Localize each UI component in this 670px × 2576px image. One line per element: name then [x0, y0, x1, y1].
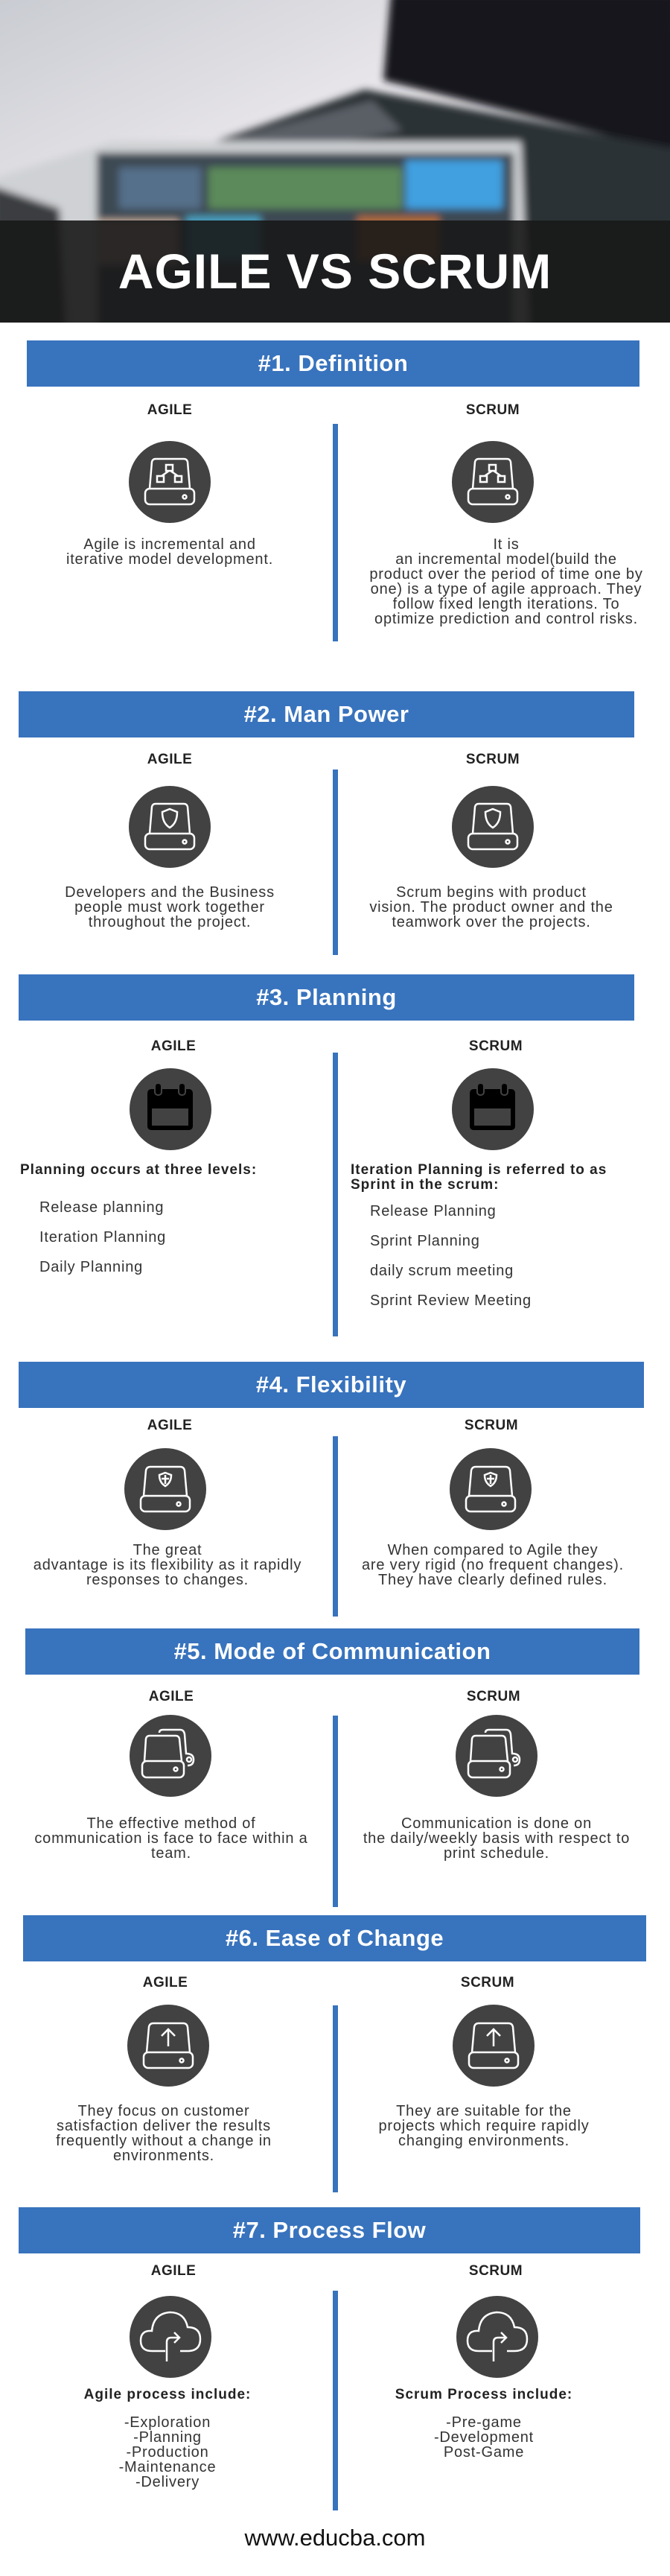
label agile: AGILE: [147, 402, 192, 418]
scrum list: Release Planning: [370, 1203, 497, 1219]
heading: [23, 1915, 646, 1961]
label agile: AGILE: [151, 1038, 196, 1054]
icon: drive shield scrum: [452, 786, 534, 868]
agile text: [34, 1815, 308, 1862]
scrum list: Sprint in the scrum:: [351, 1177, 499, 1193]
scrum text: Scrum begins with product: [396, 884, 587, 901]
scrum text: Communication is done on: [401, 1815, 592, 1832]
agile text: throughout the project.: [89, 914, 251, 930]
scrum text: It is: [493, 536, 520, 553]
heading: #2. Man Power: [244, 701, 409, 727]
agile text: advantage is its flexibility as it rapidly: [34, 1557, 302, 1573]
agile text: Agile is incremental and: [83, 536, 256, 553]
agile text: -Maintenance: [119, 2459, 216, 2475]
agile text: [34, 1542, 302, 1588]
label scrum: SCRUM: [466, 402, 520, 418]
agile text: Developers and the Business: [65, 884, 275, 901]
agile text: frequently without a change in: [56, 2133, 272, 2149]
scrum text: product over the period of time one by: [369, 566, 643, 583]
section 6: Ease of Change: [23, 1915, 646, 2192]
agile text: responses to changes.: [86, 1572, 249, 1588]
icon: calendar scrum: [452, 1068, 534, 1150]
agile text: Agile process include:: [84, 2387, 251, 2402]
label agile: AGILE: [143, 1975, 188, 1990]
label scrum: SCRUM: [461, 1975, 514, 1990]
heading: [25, 1628, 639, 1675]
icon: drive shield agile: [129, 786, 211, 868]
agile list: Planning occurs at three levels:: [20, 1162, 257, 1178]
divider: [333, 1716, 338, 1907]
scrum text: one) is a type of agile approach. They: [371, 581, 642, 597]
scrum text: follow fixed length iterations. To: [393, 596, 619, 612]
heading: [19, 691, 634, 737]
scrum text: They are suitable for the: [396, 2103, 572, 2119]
agile text: communication is face to face within a: [34, 1830, 308, 1847]
heading: #1. Definition: [258, 350, 408, 376]
footer url: www.educba.com: [245, 2525, 425, 2551]
scrum text: [378, 2103, 590, 2149]
heading: [19, 2207, 640, 2253]
heading: #6. Ease of Change: [226, 1925, 444, 1951]
divider: [333, 2291, 338, 2510]
icon: drive network agile: [129, 441, 211, 523]
heading: #4. Flexibility: [256, 1371, 406, 1398]
label scrum: SCRUM: [469, 2263, 523, 2279]
scrum text: teamwork over the projects.: [392, 914, 591, 930]
icon: drive upload agile: [127, 2005, 209, 2087]
scrum text: are very rigid (no frequent changes).: [362, 1557, 624, 1573]
scrum text: Scrum Process include:: [395, 2387, 572, 2402]
icon: two drives scrum: [456, 1715, 537, 1797]
scrum text: They have clearly defined rules.: [378, 1572, 607, 1588]
divider: [333, 2005, 338, 2192]
heading: #5. Mode of Communication: [174, 1638, 491, 1664]
agile text: -Planning: [133, 2429, 202, 2446]
label scrum: SCRUM: [466, 752, 520, 767]
section 3: Planning: [19, 974, 634, 1336]
icon: two drives agile: [130, 1715, 211, 1797]
title band: [0, 221, 670, 323]
heading: #3. Planning: [256, 984, 397, 1010]
divider: [333, 1436, 338, 1617]
icon: drive network scrum: [452, 441, 534, 523]
title band: AGILE VS SCRUM: [118, 244, 552, 299]
section 2: Man Power: [19, 691, 634, 955]
scrum text: projects which require rapidly: [378, 2118, 590, 2134]
icon: cloud arrow scrum: [456, 2296, 538, 2378]
scrum text: [363, 1815, 630, 1862]
icon: drive small shield agile: [124, 1448, 206, 1530]
agile text: [66, 536, 273, 568]
heading: [27, 340, 639, 387]
section 5: Mode of Communication: [25, 1628, 639, 1907]
icon: drive upload scrum: [453, 2005, 535, 2087]
agile text: They focus on customer: [77, 2103, 250, 2119]
scrum text: Post-Game: [444, 2444, 524, 2461]
agile text: -Exploration: [124, 2414, 211, 2431]
agile text: [84, 2387, 251, 2490]
scrum text: an incremental model(build the: [395, 551, 617, 568]
scrum text: [369, 536, 643, 627]
agile text: iterative model development.: [66, 551, 273, 568]
scrum text: [369, 884, 613, 930]
agile text: [56, 2103, 272, 2164]
scrum text: [362, 1542, 624, 1588]
label scrum: SCRUM: [467, 1689, 520, 1704]
scrum text: [395, 2387, 572, 2461]
scrum list: Sprint Planning: [370, 1233, 480, 1249]
scrum list: Sprint Review Meeting: [370, 1292, 532, 1309]
agile text: The effective method of: [86, 1815, 256, 1832]
agile text: -Production: [126, 2444, 209, 2461]
scrum list: [351, 1162, 607, 1309]
divider: [333, 1053, 338, 1336]
label agile: AGILE: [149, 1689, 194, 1704]
scrum text: print schedule.: [444, 1845, 549, 1862]
agile list: Iteration Planning: [39, 1229, 166, 1246]
agile list: Daily Planning: [39, 1259, 143, 1275]
heading: [19, 974, 634, 1021]
scrum text: -Development: [434, 2429, 534, 2446]
scrum text: the daily/weekly basis with respect to: [363, 1830, 630, 1847]
icon: cloud arrow agile: [130, 2296, 211, 2378]
scrum list: Iteration Planning is referred to as: [351, 1162, 607, 1178]
divider: [333, 770, 338, 955]
agile list: Release planning: [39, 1199, 164, 1216]
agile text: -Delivery: [135, 2474, 200, 2490]
icon: drive small shield scrum: [450, 1448, 532, 1530]
label scrum: SCRUM: [469, 1038, 523, 1054]
agile text: people must work together: [74, 899, 265, 916]
scrum text: changing environments.: [398, 2133, 570, 2149]
icon: calendar agile: [130, 1068, 211, 1150]
label agile: AGILE: [147, 752, 192, 767]
agile text: The great: [133, 1542, 202, 1558]
agile text: environments.: [113, 2148, 214, 2164]
scrum list: daily scrum meeting: [370, 1263, 514, 1279]
label agile: AGILE: [151, 2263, 196, 2279]
heading: #7. Process Flow: [233, 2217, 426, 2243]
agile list: [20, 1162, 257, 1275]
label agile: AGILE: [147, 1418, 192, 1433]
agile text: team.: [151, 1845, 191, 1862]
scrum text: -Pre-game: [446, 2414, 522, 2431]
heading: [19, 1362, 644, 1408]
scrum text: vision. The product owner and the: [369, 899, 613, 916]
label scrum: SCRUM: [465, 1418, 518, 1433]
divider: [333, 424, 338, 641]
section 1: Definition: [27, 340, 643, 641]
scrum text: When compared to Agile they: [388, 1542, 598, 1558]
section 7: Process Flow: [19, 2207, 640, 2510]
section 4: Flexibility: [19, 1362, 644, 1617]
agile text: satisfaction deliver the results: [57, 2118, 271, 2134]
agile text: [65, 884, 275, 930]
scrum text: optimize prediction and control risks.: [374, 611, 638, 627]
header photo: [0, 0, 670, 323]
